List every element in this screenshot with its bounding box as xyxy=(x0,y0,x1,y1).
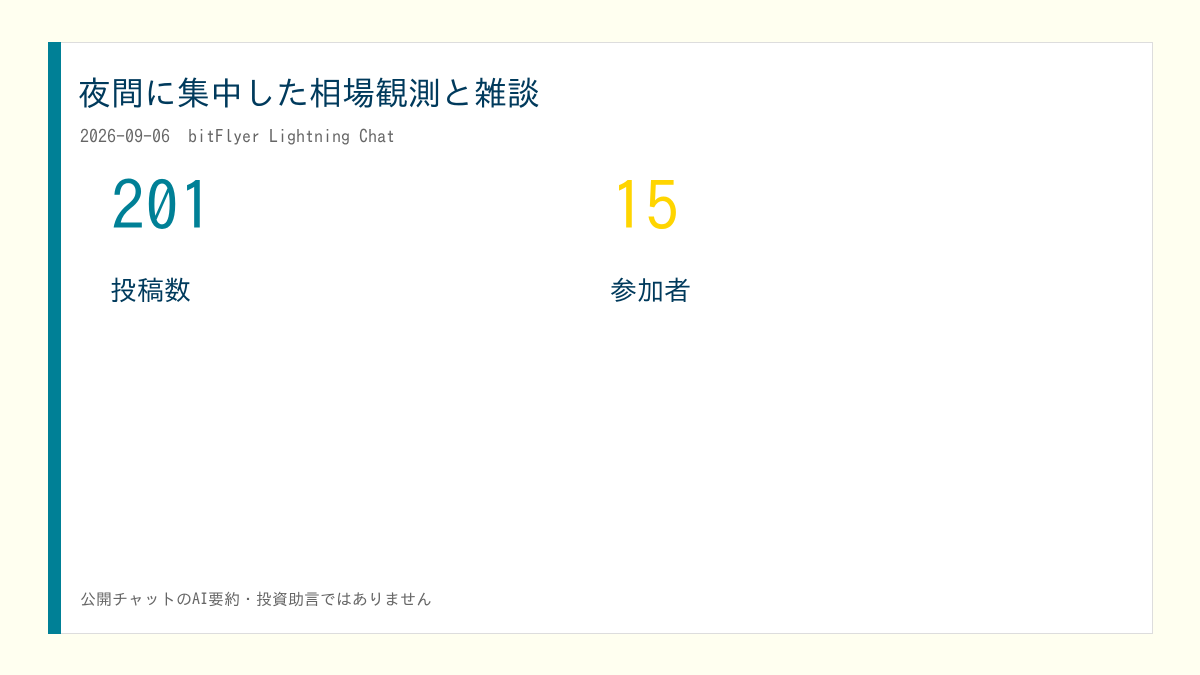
title: 夜間に集中した相場観測と雑談 xyxy=(78,76,540,109)
footer note: 公開チャットのAI要約・投資助言ではありません xyxy=(80,591,432,607)
stat: participants value: 15 xyxy=(611,172,679,240)
stat: participants label: 参加者 xyxy=(610,277,691,304)
stat: posts value: 201 xyxy=(111,172,213,240)
stat: posts label: 投稿数 xyxy=(110,277,191,304)
accent bar xyxy=(48,42,61,634)
subtitle: 2026-09-06 bitFlyer Lightning Chat xyxy=(80,128,395,146)
